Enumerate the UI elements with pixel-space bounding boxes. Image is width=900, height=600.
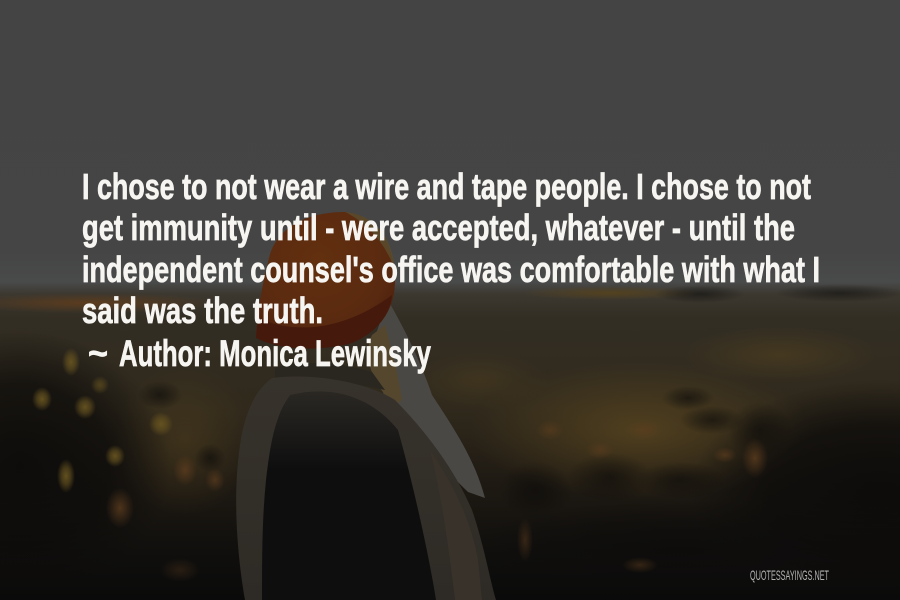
pale hair streak [372,300,485,498]
warm field specks [160,419,768,582]
distant horizon band [0,284,900,313]
dark clumps in field [138,381,792,518]
author line: ~ [88,333,108,374]
shawl highlight right [430,450,482,600]
hat [256,212,395,349]
large field shadows and glows [0,327,900,600]
blonde hair [368,325,402,405]
hat brim [256,295,392,349]
quote text [82,166,820,331]
neck scarf [275,363,385,390]
dark coat [262,391,436,600]
hat crown [256,212,395,348]
blurred yellow flowers [32,348,173,528]
author line: Author: Monica Lewinsky [119,333,431,374]
author line [88,333,431,374]
quote line 4: said was the truth. [82,290,323,331]
woman from behind [236,212,496,600]
watermark: QUOTESSAYINGS.NET [750,567,829,583]
knit shawl [236,377,496,600]
hat light rim [345,212,395,270]
